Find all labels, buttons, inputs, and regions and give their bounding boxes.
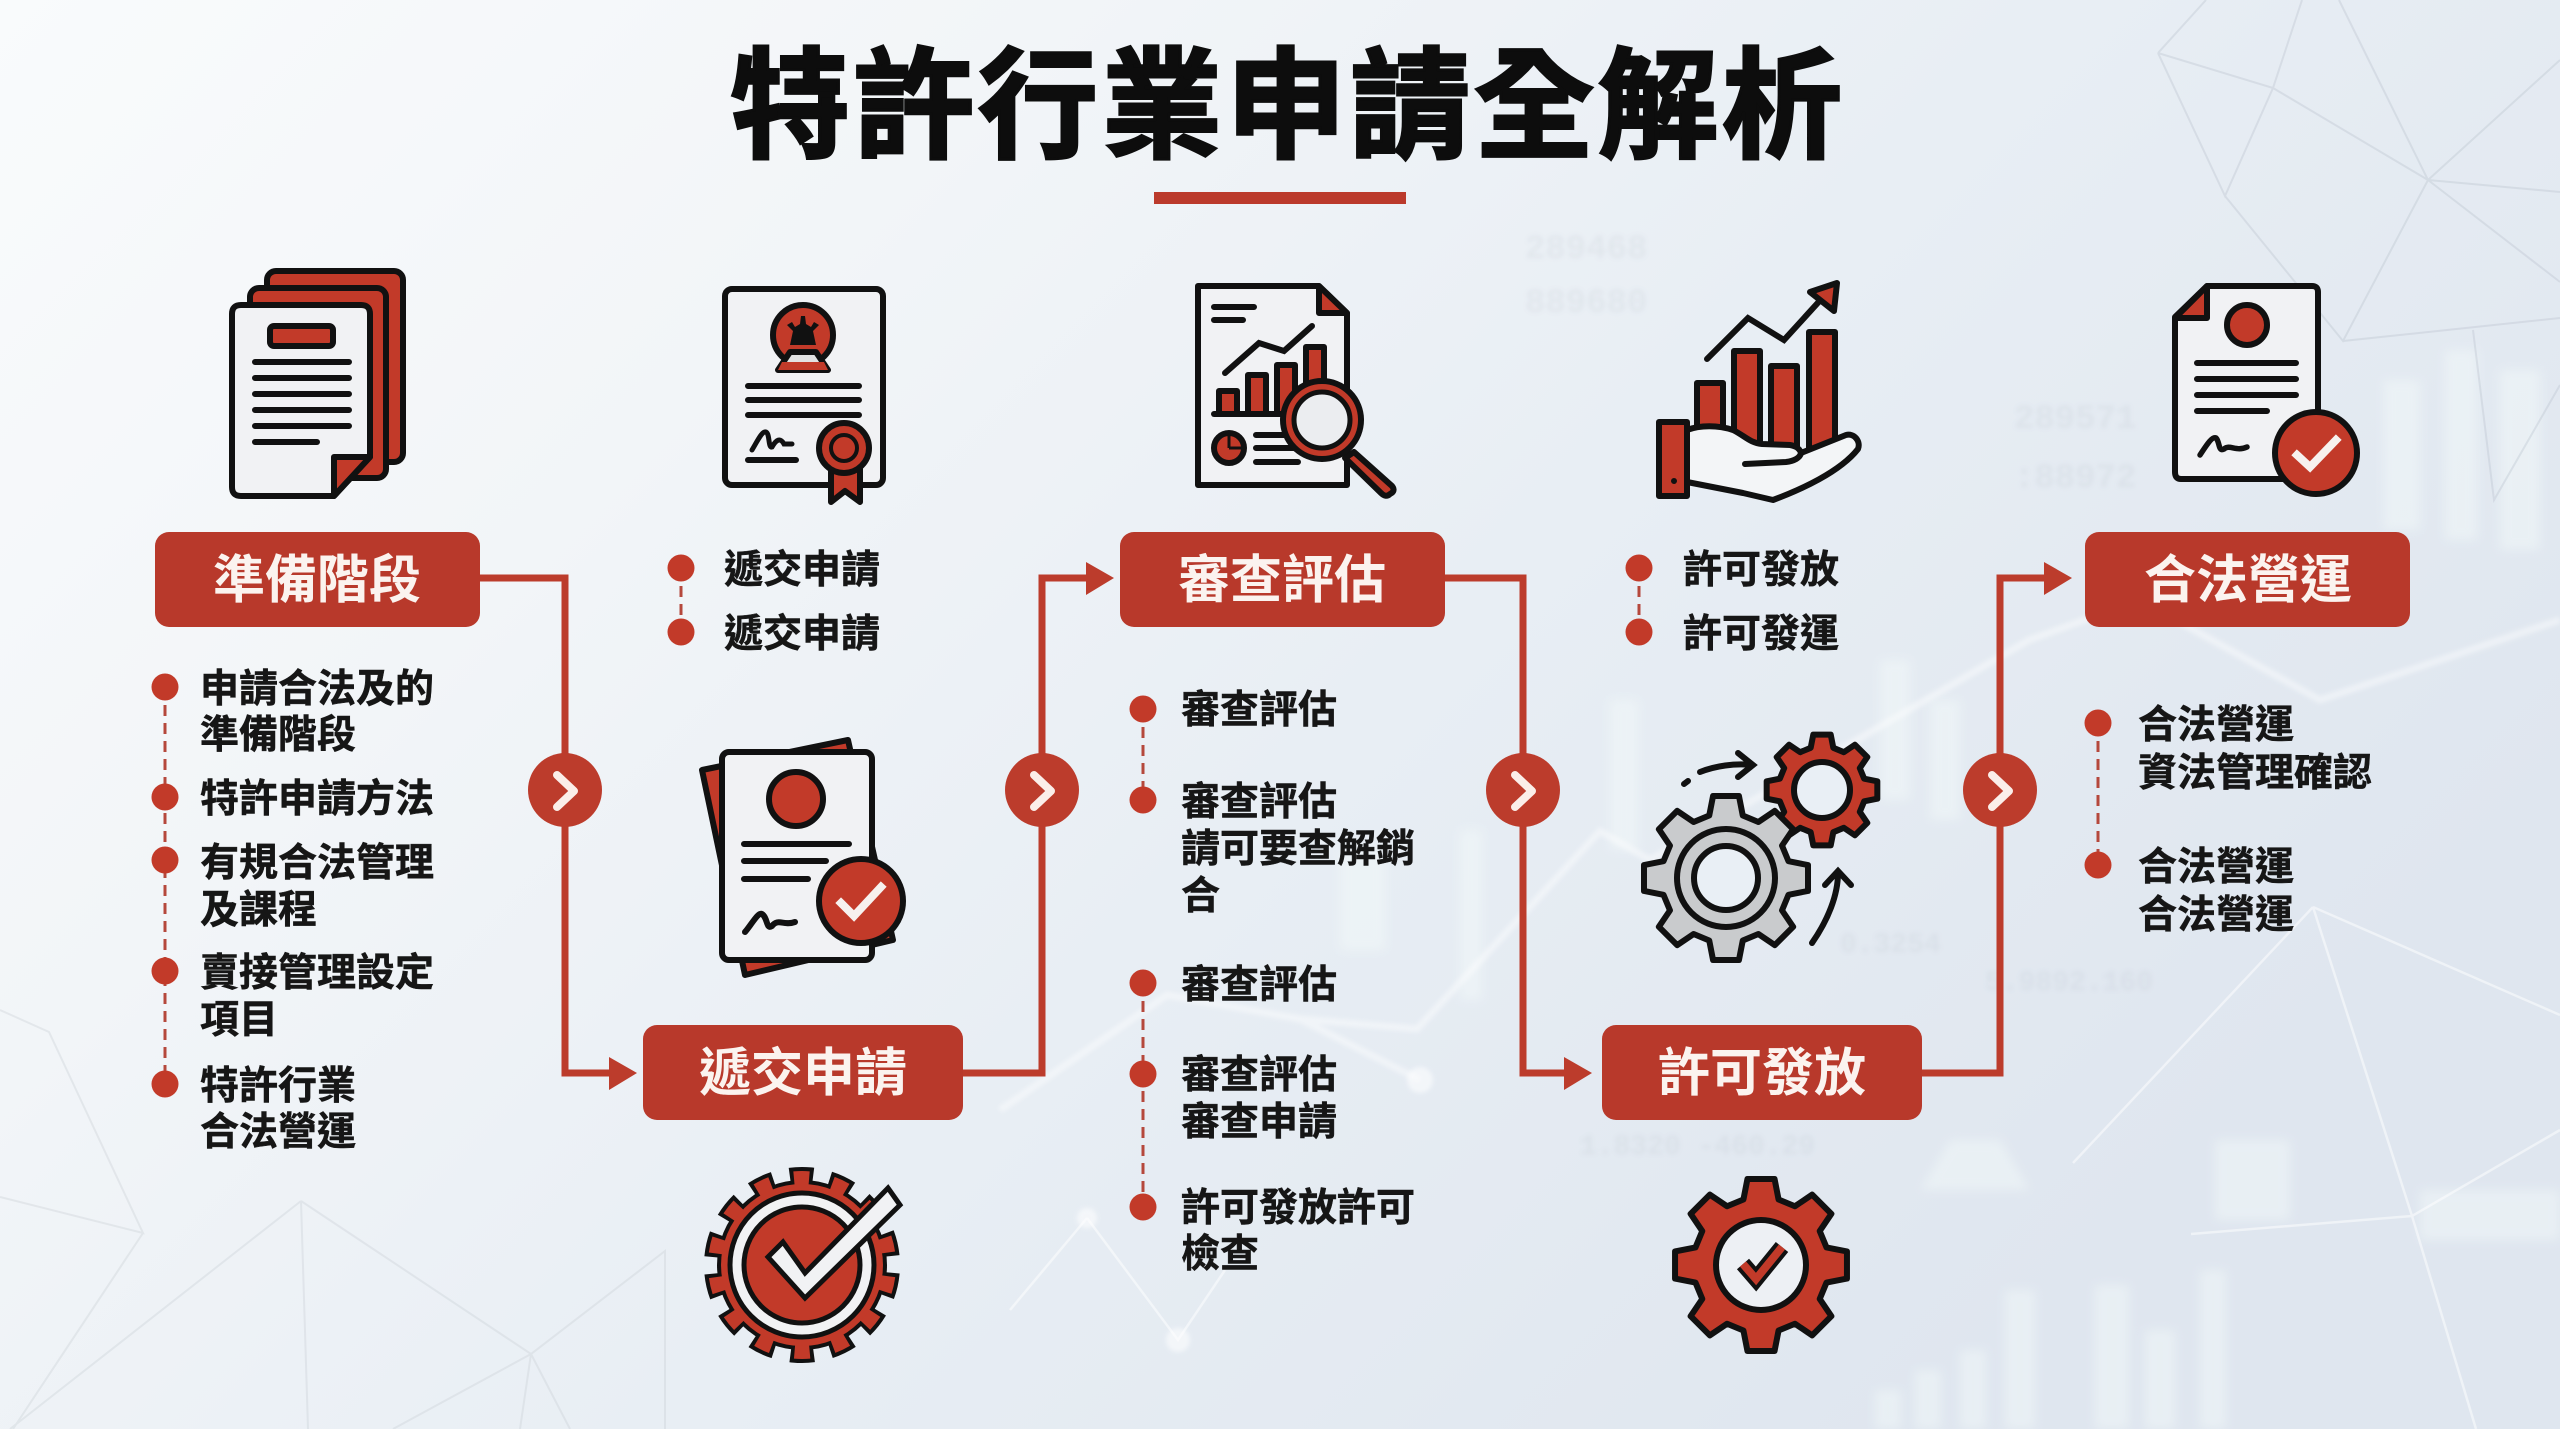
item: 許可發放許可檢查: 檢查: [1181, 1233, 1259, 1276]
item: 審查評估審查申請: 審查評估: [1181, 1054, 1337, 1097]
panel: step 4 許可發放: [1602, 283, 1922, 1351]
connector arrow: 許可發放 to 合法營運: [1922, 562, 2072, 1073]
title underline: [1154, 192, 1406, 204]
icon: certificate with seal: [725, 289, 883, 502]
item: 遞交申請: 遞交申請: [724, 549, 880, 592]
item: 特許行業合法營運: 合法營運: [200, 1111, 356, 1154]
item: 審查評估請可要查解銷合: 審查評估: [1181, 781, 1337, 824]
background: 889680: [1525, 285, 1647, 323]
heading pill: 合法營運: [2085, 532, 2410, 627]
item: 申請合法及的準備階段: [152, 668, 434, 757]
panel: step 1 準備階段: [152, 271, 480, 1154]
item: 合法營運資法管理確認: [2084, 704, 2372, 795]
item: 審查評估審查申請: 審查申請: [1181, 1101, 1337, 1144]
background: 289468: [1525, 231, 1647, 269]
background: 1.8320 -460.29: [1580, 1132, 1815, 1163]
connector arrow: 審查評估 to 許可發放: [1445, 578, 1592, 1090]
heading pill: 遞交申請: 遞交申請: [699, 1045, 907, 1103]
item: 特許行業合法營運: [152, 1065, 356, 1154]
title: 特許行業申請全解析: [730, 40, 1842, 174]
icon: interlocking gears with arrows: [1644, 735, 1877, 960]
item: 審查評估請可要查解銷合: 合: [1181, 875, 1220, 918]
heading pill: 審查評估: [1120, 532, 1445, 627]
heading pill: 審查評估: 審查評估: [1178, 552, 1386, 610]
item: 特許申請方法: 特許申請方法: [200, 778, 434, 821]
panel: step 2 遞交申請: [643, 289, 963, 1361]
item: 審查評估: 審查評估: [1181, 689, 1337, 732]
item: 審查評估請可要查解銷合: [1130, 781, 1415, 918]
heading pill: 許可發放: [1602, 1025, 1922, 1120]
item: 審查評估審查申請: [1130, 1054, 1337, 1144]
heading pill: 遞交申請: [643, 1025, 963, 1120]
item: 許可發放許可檢查: [1130, 1187, 1415, 1276]
list: step 1 items: [152, 668, 434, 1154]
icon: report with magnifier: [1198, 286, 1394, 496]
item: 許可發放: 許可發放: [1683, 549, 1839, 592]
item: 有規合法管理及課程: 有規合法管理: [200, 842, 434, 885]
item: 遞交申請 second: 遞交申請: [724, 613, 880, 656]
background: :88972: [2014, 460, 2136, 498]
heading pill: 準備階段: [155, 532, 480, 627]
icon: gear with large check: [706, 1169, 900, 1361]
list: step 4 items: [1626, 549, 1839, 656]
item: 特許行業合法營運: 特許行業: [200, 1065, 356, 1108]
item: 賣接管理設定項目: [152, 952, 434, 1042]
item: 許可發運: 許可發運: [1683, 613, 1839, 656]
icon: hand holding rising chart: [1659, 283, 1859, 500]
icon: stacked documents: [232, 271, 403, 496]
item: 審查評估 third: 審查評估: [1181, 964, 1337, 1007]
item: 賣接管理設定項目: 項目: [200, 999, 278, 1042]
item: 合法營運合法營運: 合法營運: [2138, 894, 2294, 937]
connector arrow: 遞交申請 to 審查評估: [963, 562, 1114, 1073]
list: step 5 items: [2084, 704, 2372, 937]
panel: step 5 合法營運: [2084, 286, 2410, 937]
heading pill: 準備階段: 準備階段: [213, 552, 421, 610]
item: 許可發放許可檢查: 許可發放許可: [1181, 1187, 1415, 1230]
icon: signed papers with check badge: [702, 740, 903, 975]
background: 289571: [2014, 401, 2136, 439]
background: 0.3254: [1840, 930, 1941, 961]
list: step 3 items: [1130, 689, 1415, 1276]
item: 合法營運合法營運: 合法營運: [2138, 846, 2294, 889]
panel: step 3 審查評估: [1120, 286, 1445, 1276]
item: 有規合法管理及課程: 及課程: [200, 889, 317, 932]
connector arrow: 準備階段 to 遞交申請: [480, 578, 637, 1090]
item: 賣接管理設定項目: 賣接管理設定: [200, 952, 434, 995]
heading pill: 許可發放: 許可發放: [1658, 1045, 1866, 1103]
icon: gear with small check: [1675, 1179, 1847, 1351]
list: step 2 items: [668, 549, 880, 656]
item: 合法營運資法管理確認: 資法管理確認: [2138, 752, 2372, 795]
item: 申請合法及的準備階段: 準備階段: [200, 714, 356, 757]
item: 申請合法及的準備階段: 申請合法及的: [200, 668, 434, 711]
item: 合法營運資法管理確認: 合法營運: [2138, 704, 2294, 747]
background: 5.9892.160: [1985, 968, 2153, 999]
heading pill: 合法營運: 合法營運: [2144, 552, 2352, 610]
item: 合法營運合法營運: [2084, 846, 2294, 937]
icon: signed document with check badge: [2175, 286, 2357, 494]
item: 審查評估請可要查解銷合: 請可要查解銷: [1181, 828, 1415, 871]
item: 有規合法管理及課程: [152, 842, 434, 932]
